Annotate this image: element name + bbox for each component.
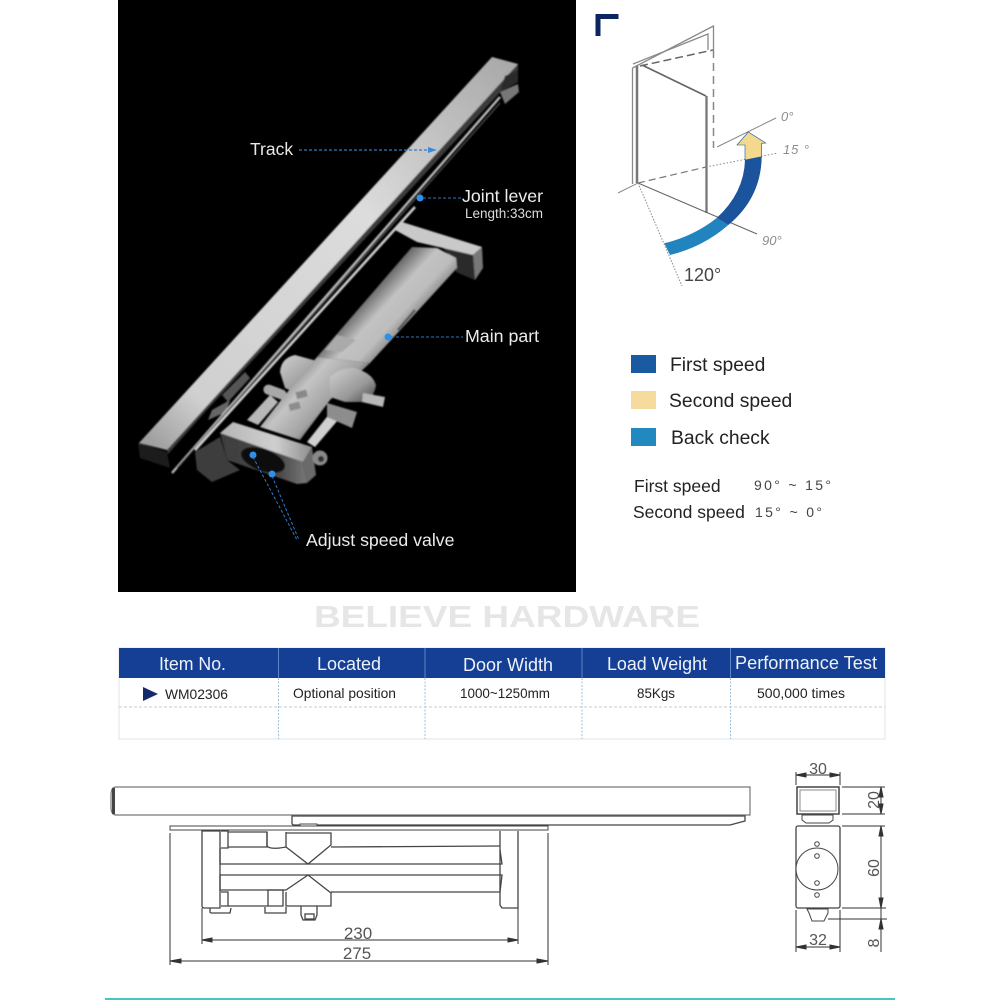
- table row: Optional position: [293, 685, 396, 701]
- body section: [796, 826, 840, 908]
- speed angle ranges: Second speed: [633, 502, 745, 522]
- legend: second speed: Second speed: [669, 391, 792, 412]
- legend: [631, 355, 792, 449]
- valve disc: [796, 842, 838, 897]
- side elevation drawing: [111, 787, 750, 965]
- label: Track: Track: [250, 139, 293, 159]
- arc: back check band: [664, 218, 728, 255]
- table header: Located: [317, 654, 381, 674]
- label: Joint lever: Length:33cm: [465, 206, 543, 221]
- table header: [119, 648, 885, 678]
- panel: product photo: [118, 0, 576, 592]
- dimension 20: [842, 787, 885, 814]
- table grid: [119, 678, 885, 739]
- speed angle ranges: First speed: [634, 476, 721, 496]
- table row: WM02306: [165, 686, 228, 702]
- adjusting bolt: [807, 909, 828, 921]
- closer body: [202, 831, 518, 920]
- dimension 275: 275: [343, 944, 371, 963]
- dimension 60: [842, 826, 886, 908]
- speed angle ranges: 90° ~ 15°: [754, 477, 831, 493]
- table header: Door Width: [463, 655, 553, 675]
- table row: [143, 685, 845, 702]
- dimension 8: [828, 908, 887, 952]
- label: Adjust speed valve: [250, 452, 455, 550]
- angle label: 15 degrees: 15 °: [783, 142, 809, 157]
- icon: corner bracket: [598, 16, 618, 36]
- label: Joint lever: [416, 186, 543, 221]
- mounting plate: [170, 826, 548, 830]
- legend: back check: Back check: [671, 428, 770, 449]
- label: Track: [250, 139, 437, 159]
- closer: top bracket: [443, 248, 475, 280]
- track section: [797, 787, 839, 814]
- label: Main part: Main part: [465, 326, 539, 346]
- dimension 32: [796, 910, 840, 952]
- speed angle ranges: 15° ~ 0°: [755, 504, 822, 520]
- connector: [802, 815, 833, 823]
- table header: Item No.: [159, 654, 226, 674]
- dimension 8: 8: [866, 938, 883, 947]
- dimension 30: [796, 761, 840, 785]
- dimension 230: 230: [344, 924, 372, 943]
- angle label: 90 degrees: 90°: [762, 233, 782, 248]
- door frame: [618, 26, 778, 286]
- speed angle ranges: [633, 476, 831, 522]
- arc: first speed band: [717, 157, 762, 225]
- table header: Performance Test: [735, 653, 877, 673]
- footer accent line: [105, 998, 895, 1000]
- closer: valve body: [247, 395, 278, 425]
- angle label: 0 degrees: 0°: [781, 109, 793, 124]
- specification table: [119, 648, 885, 739]
- dimension 230: [202, 908, 518, 944]
- door opening diagram: [618, 26, 809, 286]
- label: Joint lever: Joint lever: [462, 186, 543, 206]
- dimension 30: 30: [809, 761, 827, 778]
- label: Main part: [384, 326, 539, 346]
- label: Adjust speed valve: Adjust speed valve: [306, 530, 455, 550]
- legend: first speed: First speed: [670, 355, 765, 376]
- table row: 500,000 times: [757, 685, 845, 701]
- watermark: BELIEVE HARDWARE: [314, 599, 700, 634]
- product: door closer: [138, 57, 519, 484]
- end elevation drawing: [796, 761, 887, 952]
- sliding rail: [292, 816, 745, 825]
- dimension 20: 20: [866, 791, 883, 809]
- table row: 1000~1250mm: [460, 685, 550, 701]
- angle label: 120 degrees: 120°: [684, 265, 721, 285]
- dimension 60: 60: [866, 859, 883, 877]
- table header: Load Weight: [607, 654, 707, 674]
- dimension 32: 32: [809, 932, 827, 949]
- track outline: [111, 787, 750, 815]
- arrow: second speed: [737, 132, 766, 160]
- closer: end plate: [220, 433, 307, 484]
- table row: 85Kgs: [637, 685, 675, 701]
- dimension 275: [170, 833, 548, 965]
